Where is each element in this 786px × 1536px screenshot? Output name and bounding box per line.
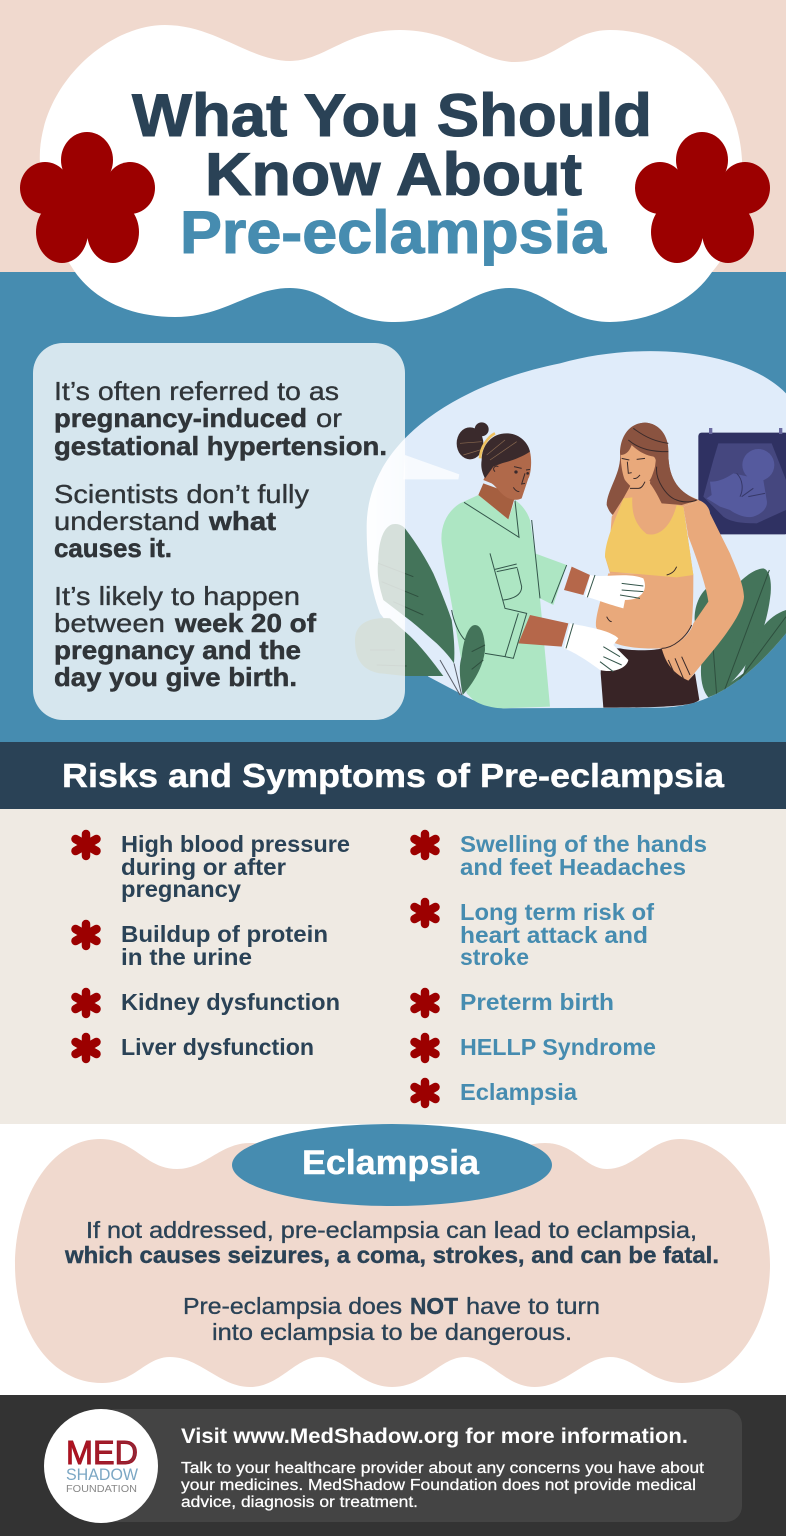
list: right column symptoms: heart attack and xyxy=(460,922,648,948)
footer xyxy=(0,1395,786,1536)
text block: also known as xyxy=(54,376,387,461)
list: left column risks: Liver dysfunction xyxy=(121,1034,314,1060)
text block: disclaimer xyxy=(181,1460,705,1511)
text block: timing: between xyxy=(54,608,165,638)
icon: asterisk bullet xyxy=(414,992,436,1014)
list: right column symptoms: and feet Headaches xyxy=(460,854,686,880)
text block: timing: day you give birth. xyxy=(54,662,297,692)
text block: danger note xyxy=(183,1293,600,1345)
text block: danger note: have to turn xyxy=(466,1293,600,1319)
list: left column risks: in the urine xyxy=(121,944,252,970)
text block: also known as: gestational hypertension. xyxy=(54,431,387,461)
panel: symptom lists background xyxy=(0,809,786,1124)
text block: causes: understand xyxy=(54,506,200,536)
text block: also known as: or xyxy=(316,403,342,433)
list: left column risks: Kidney dysfunction xyxy=(121,989,340,1015)
text block: timing: pregnancy and the xyxy=(54,635,301,665)
logo: MedShadow Foundation: SHADOW xyxy=(66,1466,138,1484)
list: right column symptoms: HELLP Syndrome xyxy=(460,1034,656,1060)
heading: eclampsia pill: Eclampsia xyxy=(302,1144,480,1182)
text block: disclaimer: advice, diagnosis or treatment. xyxy=(181,1494,418,1511)
icon: asterisk bullet xyxy=(76,1037,96,1059)
panel: intro facts card xyxy=(33,343,405,720)
icon: asterisk bullet xyxy=(414,1082,436,1104)
panel: eclampsia cloud xyxy=(15,1124,770,1387)
logo: MedShadow Foundation: FOUNDATION xyxy=(66,1483,137,1495)
text block: danger note: Pre-eclampsia does xyxy=(183,1293,402,1319)
icon: asterisk bullet xyxy=(414,1037,436,1059)
list: right column symptoms: Eclampsia xyxy=(460,1079,577,1105)
list: left column risks: during or after xyxy=(121,854,286,880)
text block: causes: what xyxy=(208,506,276,536)
list: left column risks: pregnancy xyxy=(121,876,241,902)
list: right column symptoms: Swelling of the hands xyxy=(460,831,707,857)
list: right column symptoms: Preterm birth xyxy=(460,989,614,1015)
title cloud xyxy=(40,25,743,322)
list: right column symptoms xyxy=(414,831,707,1105)
text block: disclaimer: your medicines. MedShadow Foundation does not provide medical xyxy=(181,1477,696,1494)
text block: eclampsia consequences: which causes seizures, a coma, strokes, and can be fatal. xyxy=(64,1242,719,1268)
text block: timing: week 20 of xyxy=(174,608,316,638)
heading band: risks and symptoms: Risks and Symptoms of Pre-eclampsia xyxy=(62,757,725,794)
logo: MedShadow Foundation xyxy=(44,1409,158,1523)
text block: eclampsia consequences xyxy=(64,1217,719,1268)
title xyxy=(132,82,652,266)
blue intro band xyxy=(0,272,786,742)
text block: eclampsia consequences: If not addressed, pre-eclampsia can lead to eclampsia, xyxy=(86,1217,697,1243)
icon: asterisk bullet xyxy=(76,992,96,1014)
icon: asterisk bullet xyxy=(414,834,436,856)
list: right column symptoms: Long term risk of xyxy=(460,899,654,925)
illustration: doctor examining pregnant patient xyxy=(355,351,786,708)
icon: asterisk bullet xyxy=(414,902,436,924)
list: left column risks: High blood pressure xyxy=(121,831,350,857)
text block: causes: causes it. xyxy=(54,533,172,563)
text block: danger note: NOT xyxy=(410,1293,458,1319)
icon: asterisk bullet xyxy=(76,924,96,946)
list: left column risks xyxy=(76,831,350,1060)
title: What You Should xyxy=(132,82,652,149)
text block: also known as: pregnancy-induced xyxy=(54,403,307,433)
text block: visit website: Visit www.MedShadow.org for more information. xyxy=(181,1425,688,1448)
text block: danger note: into eclampsia to be dangerous. xyxy=(212,1319,572,1345)
title: Pre-eclampsia xyxy=(180,199,607,266)
heading band: risks and symptoms xyxy=(0,742,786,809)
icon: asterisk bullet xyxy=(76,834,96,856)
list: right column symptoms: stroke xyxy=(460,944,529,970)
heading: eclampsia pill xyxy=(232,1124,552,1206)
list: left column risks: Buildup of protein xyxy=(121,921,328,947)
title: Know About xyxy=(205,141,582,208)
text block: causes xyxy=(54,479,309,563)
icon: right flower xyxy=(635,132,770,263)
icon: left flower xyxy=(20,132,155,263)
header background xyxy=(0,0,786,272)
text block: causes: Scientists don’t fully xyxy=(54,479,309,509)
text block: timing xyxy=(54,581,316,692)
logo: MedShadow Foundation: MED xyxy=(66,1434,138,1471)
text block: disclaimer: Talk to your healthcare provider about any concerns you have about xyxy=(181,1460,705,1477)
text block: also known as: It’s often referred to as xyxy=(54,376,339,406)
text block: timing: It’s likely to happen xyxy=(54,581,300,611)
